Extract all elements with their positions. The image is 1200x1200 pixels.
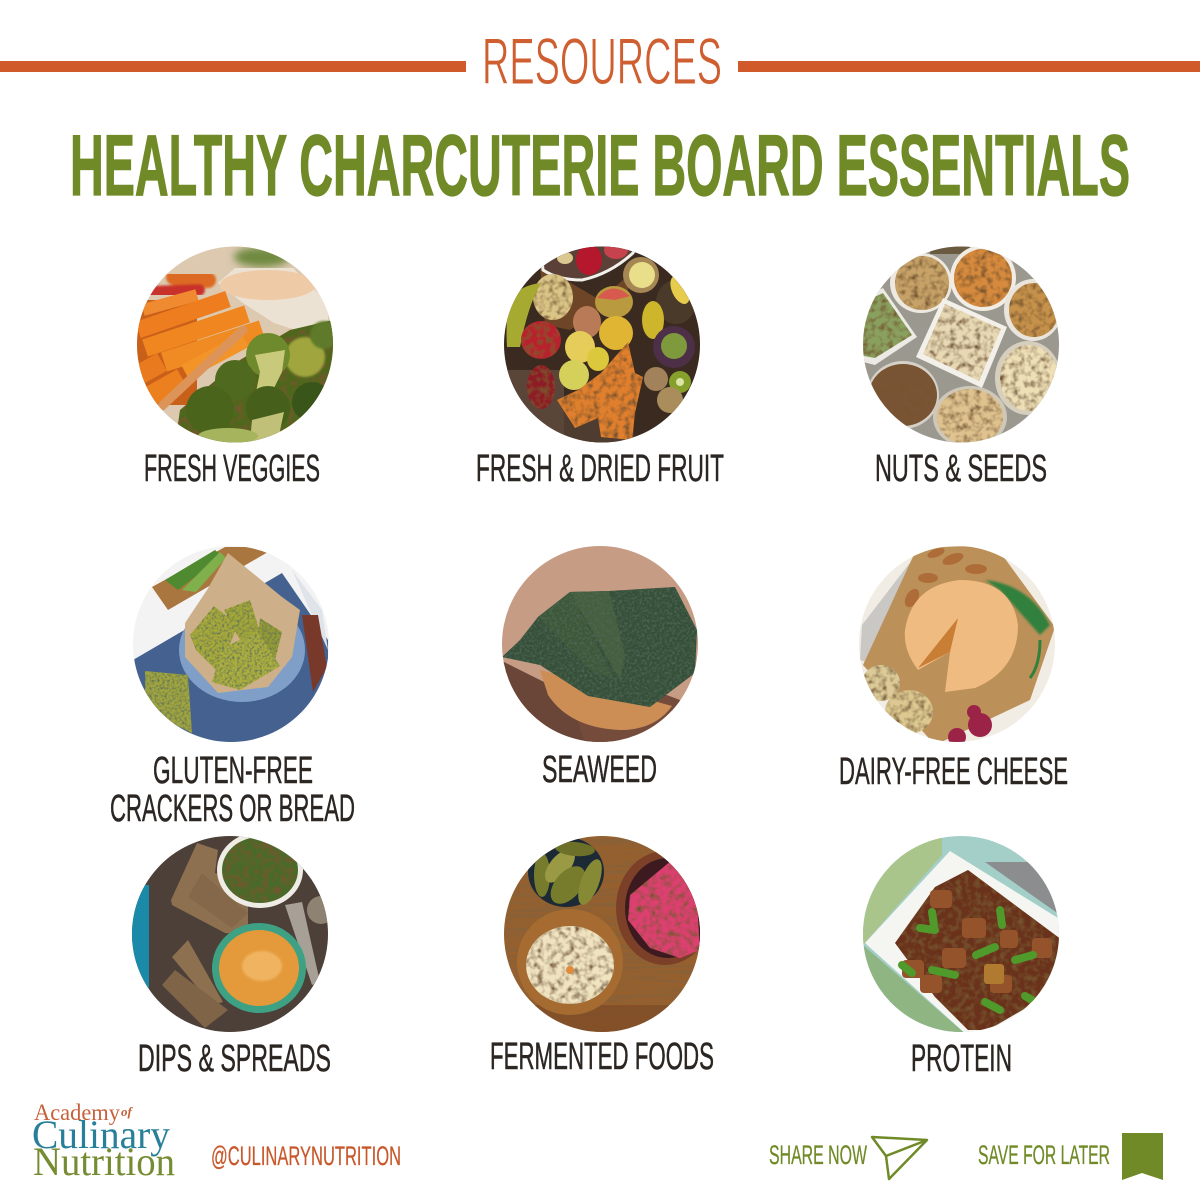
logo: academy of culinary nutrition: Nutrition [33,1139,175,1184]
label: gluten-free crackers or bread: CRACKERS OR BREAD [110,788,355,830]
photo: nuts and seeds [855,245,1062,448]
label: protein: PROTEIN [911,1038,1012,1080]
save for later text: SAVE FOR LATER [978,1140,1110,1170]
photo: dips and spreads [131,832,335,1034]
label: dips and spreads: DIPS & SPREADS [138,1038,331,1080]
photo: protein [863,835,1066,1036]
photo: gluten-free crackers [133,545,330,745]
logo: academy of culinary nutrition: of [121,1104,134,1119]
photo: fresh veggies [137,246,338,445]
logo: academy of culinary nutrition: Culinary [32,1112,170,1157]
icon: bookmark ribbon [1122,1133,1163,1180]
logo: academy of culinary nutrition [32,1100,175,1184]
photo: fermented foods [503,835,714,1034]
photo: fresh and dried fruit [504,240,700,444]
label: seaweed: SEAWEED [542,749,657,791]
header rule: left [0,61,466,72]
label: fermented foods: FERMENTED FOODS [490,1036,714,1078]
header rule: right [738,61,1200,72]
label: fresh and dried fruit: FRESH & DRIED FRUIT [476,448,724,490]
photo: dairy-free cheese [858,545,1056,746]
logo: academy of culinary nutrition: Academy [34,1100,120,1125]
label: gluten-free crackers or bread [110,750,355,830]
social handle: @CULINARYNUTRITION [211,1141,401,1171]
photo: seaweed [500,545,699,745]
label: nuts and seeds: NUTS & SEEDS [875,448,1047,490]
share now text: SHARE NOW [769,1140,867,1170]
label: fresh veggies: FRESH VEGGIES [144,448,320,490]
icon: paper plane [872,1137,927,1179]
label: gluten-free crackers or bread: GLUTEN-FREE [153,750,313,792]
section label: resources: RESOURCES [482,24,722,98]
